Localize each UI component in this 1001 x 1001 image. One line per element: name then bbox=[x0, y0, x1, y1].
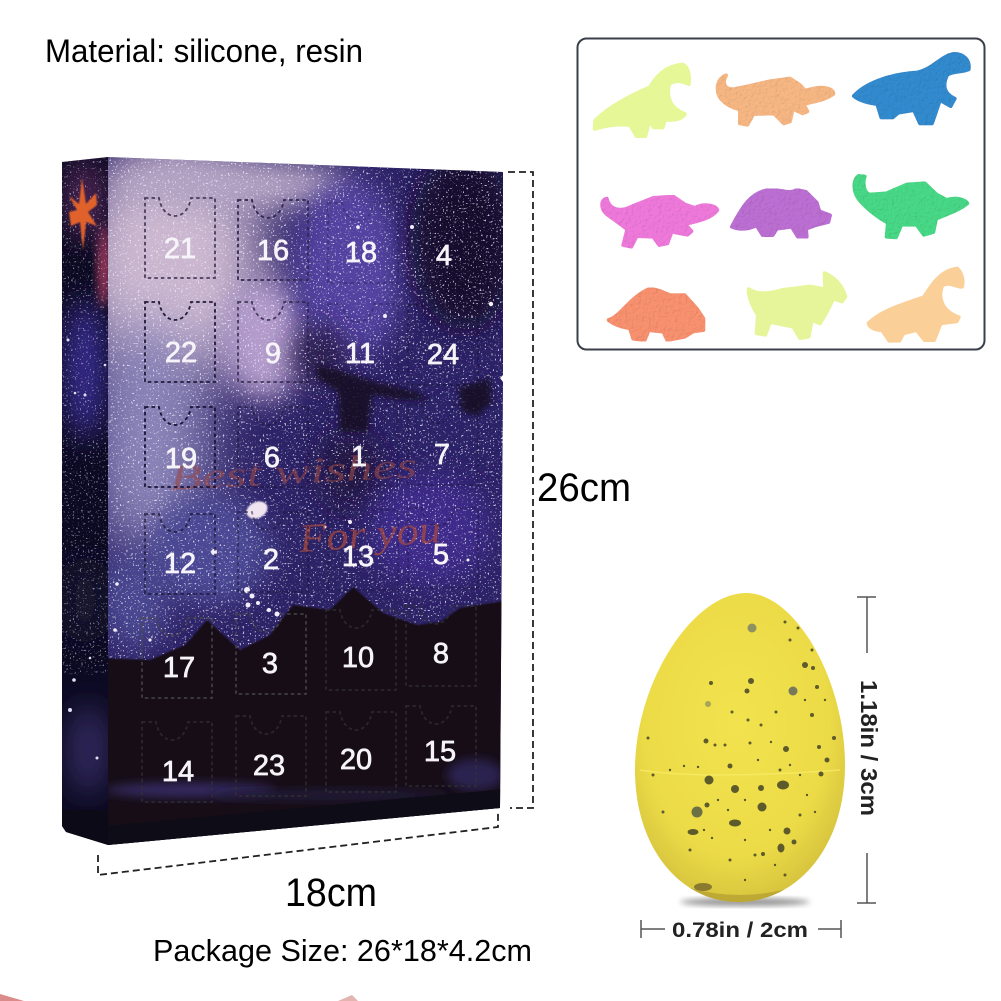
dark lower silhouette bbox=[100, 587, 510, 860]
door numbers: 14 bbox=[162, 756, 194, 788]
door numbers: 13 bbox=[342, 541, 374, 573]
door numbers: 22 bbox=[165, 337, 197, 369]
spine stars bbox=[66, 338, 106, 760]
icon: orange ankylosaur bbox=[718, 75, 833, 125]
panel: dinosaur toys bbox=[578, 38, 984, 350]
icon: coral triceratops bbox=[609, 289, 703, 340]
door numbers: 9 bbox=[265, 338, 281, 370]
vertical dimension: 1.18in / 3cm bbox=[856, 680, 882, 816]
icon: blue long-neck dinosaur bbox=[854, 54, 969, 123]
door numbers: 21 bbox=[164, 233, 196, 265]
icon: peach long-neck dinosaur bbox=[869, 269, 963, 341]
door numbers: 2 bbox=[263, 544, 279, 576]
panel: egg with dimensions bbox=[630, 590, 882, 942]
icon: pink ankylosaur bbox=[602, 197, 717, 247]
label: 26cm: 26cm bbox=[537, 466, 631, 510]
width dimension line bbox=[98, 810, 498, 875]
bright star burst bbox=[246, 500, 268, 520]
door numbers: 11 bbox=[345, 338, 375, 370]
panel: calendar box bbox=[60, 145, 520, 871]
sleigh silhouette bbox=[317, 365, 492, 432]
icon: pale crested dinosaur bbox=[749, 273, 845, 338]
door numbers: 16 bbox=[257, 235, 289, 267]
icon: orange bow on spine bbox=[69, 178, 97, 250]
icon: yellow long-neck dinosaur bbox=[595, 65, 689, 136]
icon: speckled yellow egg bbox=[630, 590, 850, 906]
height dimension line bbox=[508, 172, 533, 808]
box front artwork bbox=[108, 157, 503, 845]
door numbers: 3 bbox=[262, 648, 278, 680]
door numbers: 4 bbox=[436, 240, 452, 272]
heading: material: Material: silicone, resin bbox=[45, 33, 363, 69]
script greeting bbox=[170, 455, 440, 556]
door numbers: 10 bbox=[342, 642, 374, 674]
door outlines bbox=[142, 198, 478, 802]
script greeting: Best wishes bbox=[168, 445, 418, 498]
door numbers: 8 bbox=[433, 638, 449, 670]
door numbers: 24 bbox=[427, 339, 459, 371]
door numbers: 7 bbox=[434, 439, 450, 471]
door numbers bbox=[162, 233, 459, 788]
door numbers: 15 bbox=[424, 736, 456, 768]
script greeting: For you bbox=[296, 506, 442, 561]
door numbers: 12 bbox=[164, 548, 196, 580]
door numbers: 19 bbox=[165, 443, 197, 475]
label: package size: Package Size: 26*18*4.2cm bbox=[153, 933, 532, 968]
door numbers: 6 bbox=[264, 442, 280, 474]
door numbers: 18 bbox=[345, 237, 377, 269]
box spine bbox=[60, 155, 110, 850]
vertical dimension bbox=[856, 597, 882, 903]
panel frame bbox=[578, 38, 984, 350]
icon: purple triceratops bbox=[732, 190, 830, 237]
door numbers: 1 bbox=[351, 441, 367, 473]
door numbers: 5 bbox=[433, 539, 449, 571]
horizontal dimension bbox=[641, 919, 841, 942]
door numbers: 17 bbox=[163, 652, 195, 684]
door numbers: 23 bbox=[253, 750, 285, 782]
night stars bbox=[100, 150, 510, 670]
icon: green stegosaur bbox=[854, 176, 967, 237]
egg shadow bbox=[680, 898, 810, 906]
horizontal dimension: 0.78in / 2cm bbox=[672, 919, 808, 942]
label: 18cm: 18cm bbox=[285, 871, 377, 915]
bottom edge remnants bbox=[0, 994, 358, 1001]
door numbers: 20 bbox=[340, 744, 372, 776]
